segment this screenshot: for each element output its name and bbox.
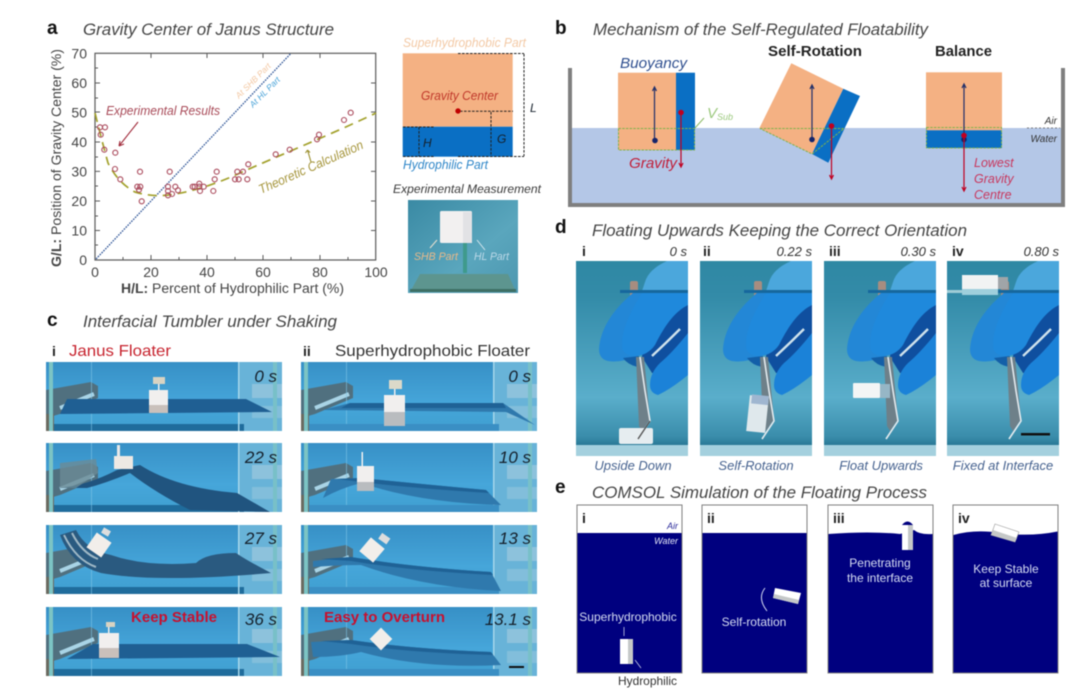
simulation iii: iii	[833, 510, 845, 526]
simulation iv: iv	[958, 510, 970, 526]
frame labels: 0.80 s	[1024, 244, 1059, 259]
frame labels: iv	[952, 243, 964, 259]
frame labels: 0.30 s	[901, 244, 936, 259]
caption: Experimental Measurement	[393, 184, 542, 196]
photo c-ii 13.1 s: Easy to Overturn	[324, 610, 445, 626]
title e: COMSOL Simulation of the Floating Process	[592, 483, 927, 502]
dimension labels: G	[497, 132, 506, 146]
photo c-ii 10 s	[301, 443, 537, 512]
photo d-iii float upwards	[824, 261, 936, 456]
label: gravity: Gravity	[629, 155, 679, 172]
x-axis tick labels: 20	[143, 264, 159, 280]
panel b: mechanism of self-regulated floatability	[555, 18, 1063, 205]
y-axis tick labels: 60	[71, 75, 87, 91]
panel letter e: e	[555, 477, 566, 498]
label: gravity center: Gravity Center	[421, 88, 499, 103]
x-axis tick labels: 0	[91, 264, 99, 280]
photo c-i 22 s	[46, 443, 282, 512]
floater 3: balance	[926, 72, 1002, 191]
label: HL part: HL Part	[474, 251, 510, 263]
label: HL part	[474, 240, 510, 263]
label: lowest gravity centre: Centre	[974, 188, 1012, 202]
y-axis title: G/L: Position of Gravity Center (%)	[49, 49, 64, 267]
frame labels: ii	[703, 243, 711, 259]
photo c-ii 10 s: 10 s	[499, 448, 531, 467]
panel a: gravity center of Janus structure	[47, 18, 542, 296]
white cube on post	[410, 211, 516, 292]
photo background	[408, 200, 518, 293]
label: V sub	[695, 105, 733, 128]
photo c-i 27 s	[46, 525, 282, 594]
simulation ii: ii	[707, 510, 715, 526]
panel letter d: d	[555, 217, 567, 238]
label: superhydrophobic part: Superhydrophobic Part	[403, 35, 527, 50]
title b: Mechanism of the Self-Regulated Floatability	[593, 20, 930, 39]
panel d: floating upwards keeping the correct orientation	[555, 217, 1059, 473]
simulation i: Hydrophilic	[618, 674, 677, 688]
photo c-ii 0 s: 0 s	[508, 367, 531, 386]
column ii heading: ii	[303, 343, 311, 359]
theoretic dashed curve	[95, 113, 376, 196]
photo d-iv fixed at interface	[947, 261, 1059, 456]
simulation iv	[953, 505, 1058, 673]
photo captions: Float Upwards	[839, 458, 923, 473]
y-axis tick labels: 50	[71, 104, 87, 120]
frame labels: 0 s	[670, 244, 687, 259]
label: air: Air	[1044, 116, 1058, 127]
photo c-ii 13.1 s: 13.1 s	[485, 610, 531, 629]
y-axis tick labels: 40	[71, 134, 87, 150]
diagonal dotted line	[96, 53, 291, 259]
photo c-ii 13 s: 13 s	[499, 529, 531, 548]
label: theoretic calculation with arrow: Theoretic Calculation	[256, 137, 365, 197]
photo c-i 0 s	[46, 362, 282, 431]
frame labels: i	[582, 243, 586, 259]
photo c-i 36 s: 36 s	[245, 610, 277, 629]
x-axis tick labels: 100	[364, 264, 388, 280]
panel letter b: b	[555, 18, 567, 39]
label: at HL part: At HL Part	[247, 74, 282, 110]
label: lowest gravity centre: Lowest	[974, 156, 1014, 170]
y-axis tick labels: 20	[71, 193, 87, 209]
simulation iii	[828, 505, 933, 673]
photo c-ii 0 s	[301, 362, 537, 431]
label: V sub: Sub	[717, 112, 733, 122]
frame labels	[582, 243, 1059, 259]
y-axis tick labels: 10	[71, 222, 87, 238]
label: lowest gravity centre: Gravity	[974, 172, 1014, 186]
photo captions: Fixed at Interface	[953, 458, 1053, 473]
y-axis tick labels: 30	[71, 164, 87, 180]
heading: balance: Balance	[935, 43, 992, 60]
photo d-ii self-rotation	[700, 261, 812, 456]
panel e: COMSOL simulation of the floating process	[555, 477, 1058, 688]
simulation i: Water	[654, 536, 679, 546]
column i heading: i	[52, 343, 56, 359]
floater 1: initial state	[618, 73, 695, 167]
photo c-i 0 s: 0 s	[254, 367, 277, 386]
photo c-ii 13 s	[301, 525, 537, 594]
x-axis title: H/L: Percent of Hydrophilic Part (%)	[121, 281, 344, 296]
label: experimental results with arrow: Experimental Results	[106, 104, 220, 118]
column i heading: Janus Floater	[69, 343, 172, 360]
blue hydrophilic block	[403, 127, 513, 157]
dimension labels: H	[423, 136, 432, 150]
photo c-i 22 s: 22 s	[244, 448, 277, 467]
column ii heading: Superhydrophobic Floater	[335, 343, 531, 360]
x-axis tick labels	[91, 264, 388, 280]
label: V sub: V	[707, 105, 717, 122]
heading: self-rotation: Self-Rotation	[768, 43, 862, 60]
floater 2: rotating	[759, 63, 860, 179]
label: buoyancy: Buoyancy	[620, 56, 688, 72]
plot frame and ticks	[95, 53, 376, 260]
water tank	[570, 68, 1063, 205]
x-axis tick labels: 40	[199, 264, 215, 280]
simulation iii: the interface	[847, 571, 913, 585]
simulation ii: Self-rotation	[722, 615, 786, 629]
dimension dashes	[403, 54, 524, 156]
frame labels: iii	[829, 243, 841, 259]
photo d-i upside down	[576, 261, 688, 456]
simulation i: Air	[666, 521, 679, 531]
label: SHB part	[414, 240, 459, 263]
photo captions: Self-Rotation	[718, 458, 794, 473]
y-axis tick labels	[71, 46, 87, 268]
label: at SHB part: At SHB Part	[233, 60, 273, 101]
dimension labels: L	[530, 101, 537, 115]
label: experimental results with arrow	[106, 104, 220, 146]
simulation iii: Penetrating	[849, 556, 911, 570]
label: water: Water	[1030, 134, 1058, 145]
panel letter c: c	[47, 310, 58, 331]
simulation i	[577, 505, 682, 688]
frame labels: 0.22 s	[777, 244, 812, 259]
x-axis tick labels: 80	[312, 264, 328, 280]
experimental data points	[98, 110, 353, 204]
title d: Floating Upwards Keeping the Correct Orientation	[592, 221, 967, 240]
simulation i: Superhydrophobic	[579, 610, 677, 624]
dimension labels	[423, 101, 537, 150]
photo captions	[594, 458, 1053, 473]
label: hydrophilic part: Hydrophilic Part	[403, 157, 489, 172]
photo c-i 36 s: Keep Stable	[131, 610, 217, 626]
gravity center dot	[455, 108, 461, 114]
photo c-i 36 s	[46, 607, 282, 676]
simulation iv: Keep Stable	[973, 562, 1039, 576]
line chart: G/L versus H/L	[49, 46, 388, 296]
label: SHB part: SHB Part	[414, 251, 459, 263]
panel letter a: a	[47, 18, 58, 39]
simulation i: i	[582, 510, 586, 526]
schematic: Janus structure cross-section	[403, 35, 537, 172]
title c: Interfacial Tumbler under Shaking	[83, 312, 338, 331]
orange superhydrophobic block	[403, 53, 513, 127]
photo c-ii 13.1 s	[301, 607, 537, 676]
simulation ii	[702, 505, 807, 673]
y-axis tick labels: 70	[71, 46, 87, 62]
simulation iv: at surface	[980, 576, 1033, 590]
panel c: interfacial tumbler under shaking	[46, 310, 537, 676]
title a: Gravity Center of Janus Structure	[83, 20, 334, 39]
photo captions: Upside Down	[594, 458, 672, 473]
experimental measurement photo	[393, 184, 542, 293]
x-axis tick labels: 60	[255, 264, 271, 280]
photo c-i 27 s: 27 s	[244, 529, 277, 548]
y-axis tick labels: 0	[79, 252, 87, 268]
